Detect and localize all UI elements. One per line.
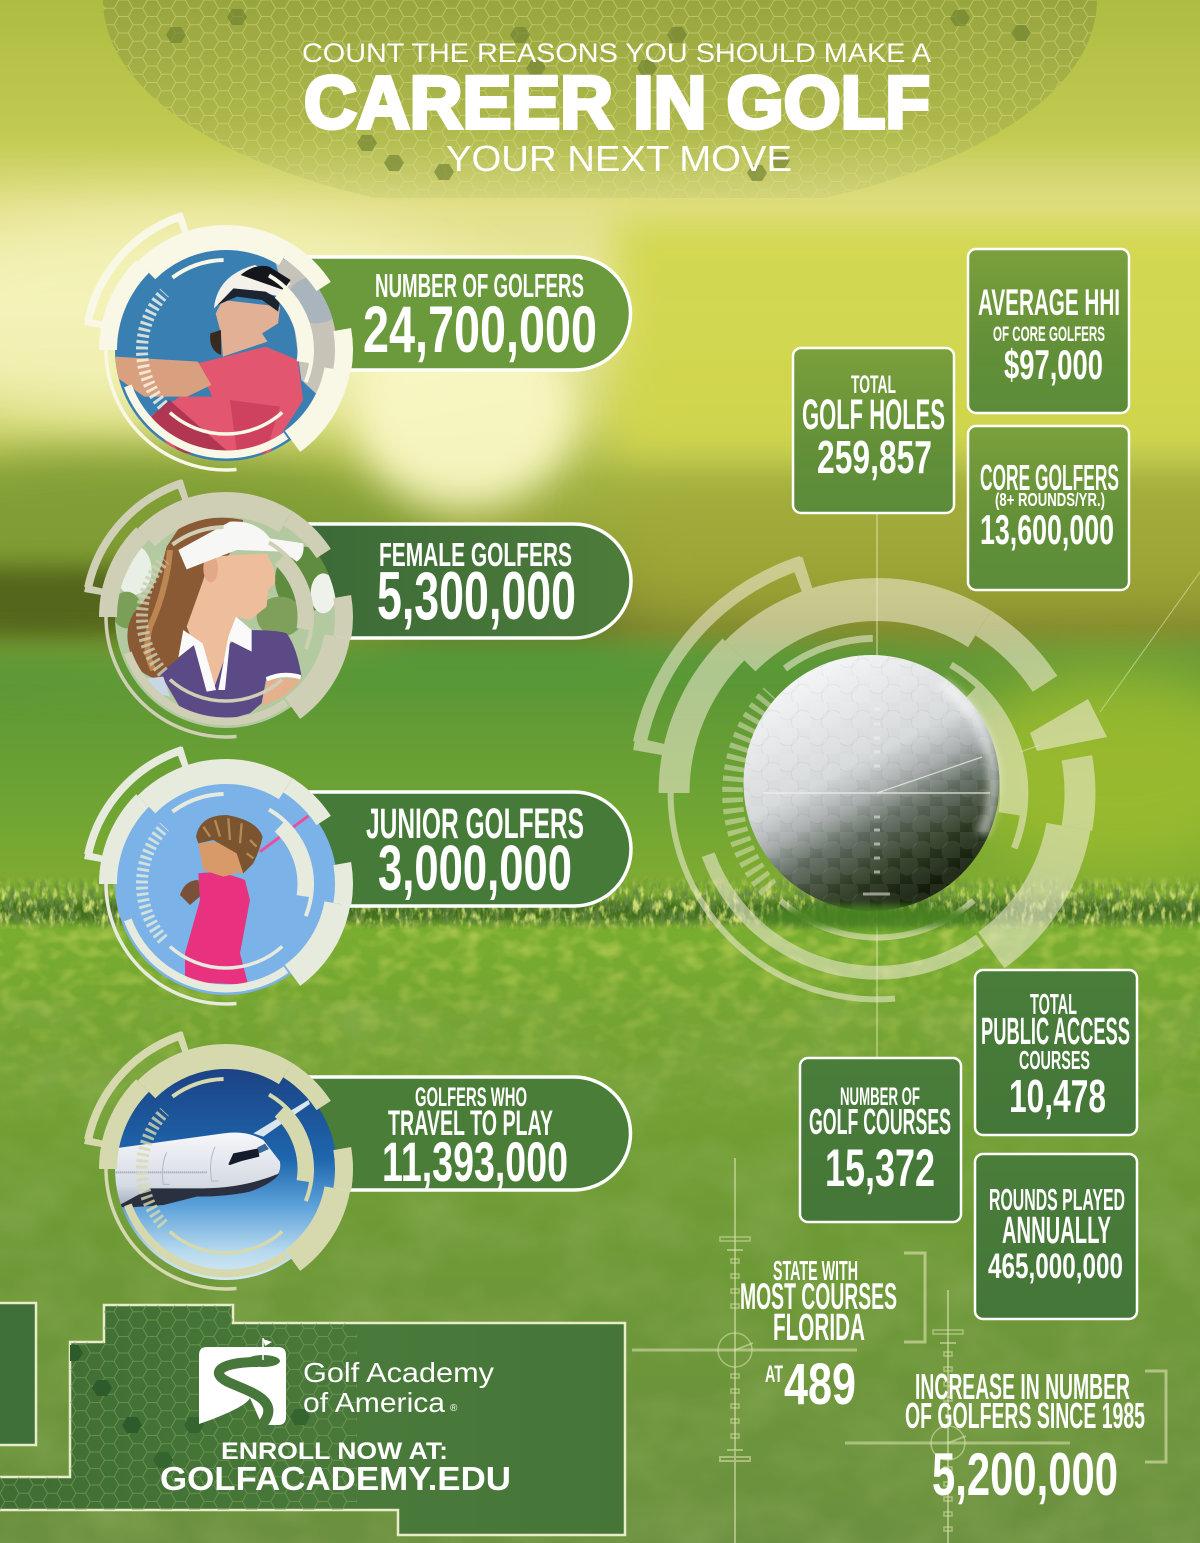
title: COUNT THE REASONS YOU SHOULD MAKE A xyxy=(302,38,931,68)
pill xyxy=(308,792,631,906)
scope graphic right xyxy=(845,1290,1070,1543)
label and value: 3,000,000 xyxy=(378,832,572,904)
box: total public access courses: TOTAL xyxy=(1030,989,1077,1021)
logo wordmark: of America xyxy=(303,1387,445,1418)
photo: junior golfer xyxy=(115,784,336,995)
box: total golf holes: GOLF HOLES xyxy=(802,391,945,439)
scope graphic left xyxy=(632,1158,857,1543)
golf ball target graphic xyxy=(633,556,1107,1002)
text: state with most courses: AT xyxy=(765,1361,783,1388)
ring graphic xyxy=(57,1000,395,1338)
label and value: NUMBER OF GOLFERS xyxy=(375,267,584,304)
photo: female golfer xyxy=(115,517,336,728)
photo: male golfer xyxy=(115,250,336,461)
box: average hhi xyxy=(968,249,1129,413)
label and value: TRAVEL TO PLAY xyxy=(388,1104,553,1143)
target rings around ball xyxy=(587,503,1167,1083)
box: core golfers xyxy=(968,426,1129,590)
golf ball xyxy=(744,655,1004,911)
text: state with most courses xyxy=(740,1255,897,1417)
label and value: 5,300,000 xyxy=(377,558,576,634)
logo wordmark xyxy=(303,1357,494,1418)
box: core golfers: 13,600,000 xyxy=(980,506,1114,553)
ball crosshair xyxy=(763,709,990,894)
logo wordmark: ® xyxy=(450,1403,458,1414)
stat row: golfers who travel xyxy=(57,1000,631,1338)
box: number of golf courses: 15,372 xyxy=(825,1139,935,1198)
hexagon pattern xyxy=(0,1305,357,1510)
label and value xyxy=(377,536,576,634)
label and value: 24,700,000 xyxy=(363,292,597,366)
label and value xyxy=(363,267,597,366)
label and value: 11,393,000 xyxy=(382,1130,568,1193)
label and value: JUNIOR GOLFERS xyxy=(366,800,584,848)
call to action text: ENROLL NOW AT: xyxy=(221,1438,448,1465)
grass in front of ball xyxy=(759,905,983,929)
header hexagon pattern cap xyxy=(100,0,1100,198)
box: core golfers: (8+ ROUNDS/YR.) xyxy=(995,490,1105,510)
title: YOUR NEXT MOVE xyxy=(446,138,792,179)
label and value xyxy=(366,800,584,904)
call to action text xyxy=(160,1438,511,1497)
label and value xyxy=(382,1082,568,1193)
text: increase in number of golfers xyxy=(905,1366,1145,1508)
title: CAREER IN GOLF xyxy=(304,61,930,144)
box: number of golf courses: GOLF COURSES xyxy=(809,1101,951,1142)
call to action panel xyxy=(0,1305,625,1535)
box: number of golf courses xyxy=(800,1058,961,1222)
left edge panel xyxy=(0,1303,36,1445)
box: average hhi: $97,000 xyxy=(1004,341,1103,388)
ring graphic xyxy=(57,448,395,786)
text: state with most courses: 489 xyxy=(784,1352,856,1417)
box: total golf holes xyxy=(793,348,954,513)
text: state with most courses: FLORIDA xyxy=(773,1307,865,1349)
pill xyxy=(308,1077,630,1190)
box: total golf holes: TOTAL xyxy=(851,371,896,399)
pill xyxy=(308,257,630,370)
text: increase in number of golfers: 5,200,000 xyxy=(932,1441,1118,1508)
box: total public access courses: COURSES xyxy=(1019,1045,1090,1075)
wedge marker xyxy=(1030,699,1107,751)
text: state with most courses: STATE WITH xyxy=(773,1255,858,1286)
ring graphic xyxy=(57,181,395,519)
logo wordmark: Golf Academy xyxy=(303,1357,494,1388)
bracket: increase xyxy=(1145,1371,1166,1462)
bracket: state xyxy=(904,1253,925,1342)
box: total public access courses xyxy=(975,970,1137,1135)
label and value: FEMALE GOLFERS xyxy=(379,536,572,573)
pill xyxy=(308,524,631,638)
label and value: GOLFERS WHO xyxy=(415,1082,527,1112)
title xyxy=(302,38,931,179)
text: state with most courses: MOST COURSES xyxy=(740,1276,897,1317)
box: rounds played annually: 465,000,000 xyxy=(988,1247,1123,1286)
box: rounds played annually xyxy=(975,1154,1137,1319)
ring graphic xyxy=(57,715,395,1053)
photo: airplane xyxy=(115,1069,336,1280)
box: total golf holes: 259,857 xyxy=(817,431,932,483)
box: number of golf courses: NUMBER OF xyxy=(840,1083,920,1111)
box: average hhi: OF CORE GOLFERS xyxy=(993,323,1105,346)
call to action text: GOLFACADEMY.EDU xyxy=(160,1460,511,1497)
box: total public access courses: 10,478 xyxy=(1009,1070,1106,1122)
stat row: female golfers xyxy=(57,448,631,786)
stat row: number of golfers xyxy=(57,181,631,519)
logo mark xyxy=(199,1338,286,1425)
connector lines xyxy=(877,513,1200,1058)
stat row: junior golfers xyxy=(57,715,631,1053)
